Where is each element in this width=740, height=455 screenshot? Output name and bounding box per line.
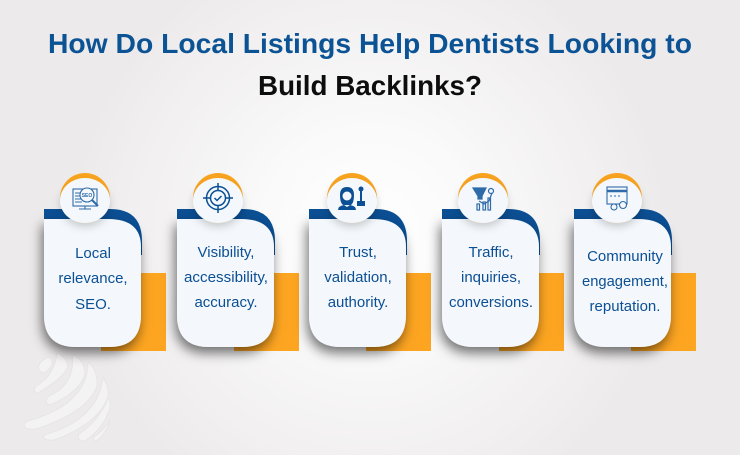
- icon circle: [193, 178, 243, 223]
- white card: [442, 219, 539, 347]
- blue card back: [309, 209, 407, 255]
- card text: inquiries,: [461, 269, 521, 286]
- orange block: [499, 273, 564, 351]
- card text: Community: [587, 248, 663, 265]
- panel: traffic card: [442, 173, 564, 351]
- card text: [184, 244, 268, 311]
- card text: SEO.: [75, 296, 111, 313]
- panel: trust card: [309, 173, 431, 351]
- card text: Visibility,: [198, 244, 254, 261]
- card text: [58, 245, 128, 313]
- card text: Local: [75, 245, 111, 262]
- card text: relevance,: [58, 270, 128, 287]
- white card: [574, 219, 671, 347]
- icon circle: [327, 178, 377, 223]
- watermark globe: [24, 353, 110, 441]
- icon: funnel and bars: [473, 188, 494, 210]
- blue card back: [442, 209, 540, 255]
- orange icon ring: [60, 173, 110, 223]
- card text: accessibility,: [184, 269, 268, 286]
- blue card back: [44, 209, 142, 255]
- icon: target: [203, 183, 233, 213]
- card text: validation,: [324, 269, 392, 286]
- orange icon ring: [193, 173, 243, 223]
- panel: community card: [574, 173, 696, 351]
- card text: conversions.: [449, 294, 533, 311]
- card text: Traffic,: [468, 244, 514, 261]
- title: How Do Local Listings Help Dentists Looking to: [48, 28, 692, 59]
- white card: [177, 219, 274, 347]
- orange icon ring: [458, 173, 508, 223]
- blue card back: [574, 209, 672, 255]
- orange icon ring: [327, 173, 377, 223]
- card text: [449, 244, 533, 311]
- icon circle: [458, 178, 508, 223]
- blue card back: [177, 209, 275, 255]
- card text: accuracy.: [194, 294, 258, 311]
- orange block: [631, 273, 696, 351]
- icon: SEO magnifier: SEO: [82, 193, 92, 199]
- title: Build Backlinks?: [258, 70, 482, 101]
- orange block: [234, 273, 299, 351]
- icon: SEO magnifier: [73, 188, 98, 209]
- white card: [44, 219, 141, 347]
- title: [48, 28, 692, 101]
- icon circle: [60, 178, 110, 223]
- orange block: [101, 273, 166, 351]
- icon circle: [592, 178, 642, 223]
- card text: reputation.: [590, 298, 660, 315]
- orange icon ring: [592, 173, 642, 223]
- white card: [309, 219, 406, 347]
- card text: Trust,: [339, 244, 377, 261]
- card text: [582, 248, 668, 315]
- icon: review window: [607, 187, 627, 210]
- card text: engagement,: [582, 273, 668, 290]
- card text: [324, 244, 392, 311]
- icon: person with joystick: [338, 186, 365, 210]
- panel: visibility card: [177, 173, 299, 351]
- panel: local relevance card: [44, 173, 166, 351]
- orange block: [366, 273, 431, 351]
- card text: authority.: [328, 294, 388, 311]
